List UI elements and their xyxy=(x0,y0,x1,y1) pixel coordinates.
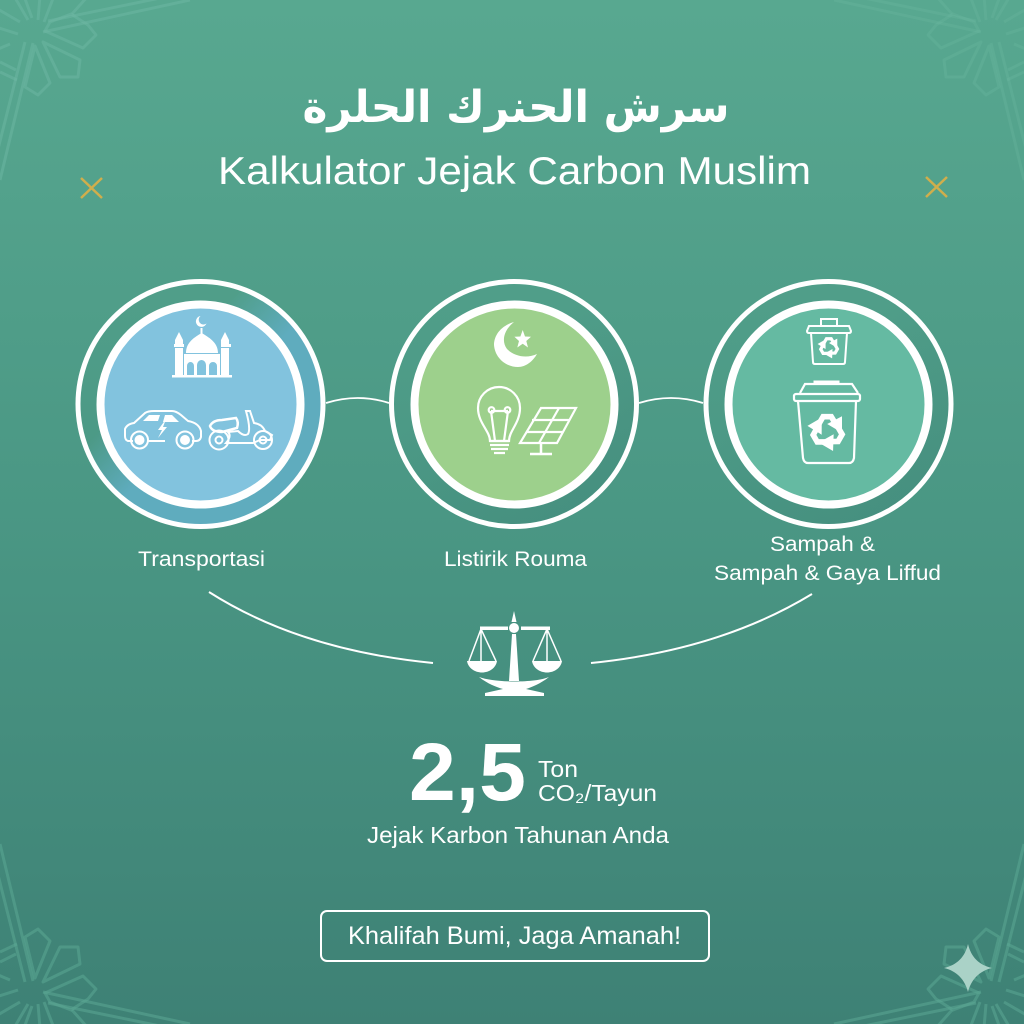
icon: scooter xyxy=(210,411,272,450)
connector: transport to electricity xyxy=(326,398,389,403)
disc xyxy=(414,304,614,504)
stat: value: 2,5 xyxy=(409,727,526,818)
connector: right curve to scale xyxy=(591,594,812,663)
label: sampah and gaya: Sampah & Gaya Liffud xyxy=(714,562,941,585)
callout: slogan button xyxy=(321,911,709,961)
ornament: top left corner xyxy=(0,0,190,180)
outer ring xyxy=(402,292,626,516)
label: sampah heading: Sampah & xyxy=(770,533,875,556)
icon: gold cross right xyxy=(926,177,947,197)
panel: transportasi xyxy=(78,282,323,526)
disc xyxy=(100,304,300,504)
label: transportasi: Transportasi xyxy=(138,548,265,571)
icon: solar panel xyxy=(520,408,576,454)
disc xyxy=(728,304,928,504)
icon: light bulb xyxy=(478,387,520,453)
title: arabic heading: سرش الحنرك الحلرة xyxy=(302,82,730,133)
ornament: top right corner xyxy=(834,0,1024,180)
icon: gold cross left xyxy=(81,178,102,198)
panel: sampah xyxy=(706,282,951,526)
icon: four point star xyxy=(944,944,992,992)
icon: electric car xyxy=(125,411,201,448)
stat: caption: Jejak Karbon Tahunan Anda xyxy=(367,822,669,848)
icon: mosque xyxy=(172,316,232,378)
callout: slogan button: Khalifah Bumi, Jaga Amanah! xyxy=(348,922,681,950)
stat: unit ton: Ton xyxy=(538,756,578,782)
icon: balance scale xyxy=(467,611,562,696)
label: listirik rouma: Listirik Rouma xyxy=(444,548,587,571)
connector: electricity to waste xyxy=(639,398,703,403)
title: latin heading: Kalkulator Jejak Carbon Muslim xyxy=(218,150,811,193)
connector: left curve to scale xyxy=(209,592,433,663)
icon: crescent and star xyxy=(494,322,537,367)
icon: large recycling bin xyxy=(794,382,860,463)
stat: unit co2 per year: CO₂/Tayun xyxy=(538,780,657,806)
outer ring xyxy=(716,292,940,516)
ornament: bottom right corner xyxy=(834,844,1024,1024)
ornament: bottom left corner xyxy=(0,844,190,1024)
panel: listrik rumah xyxy=(392,282,636,526)
outer ring xyxy=(88,292,312,516)
icon: small recycling bin xyxy=(807,319,851,364)
